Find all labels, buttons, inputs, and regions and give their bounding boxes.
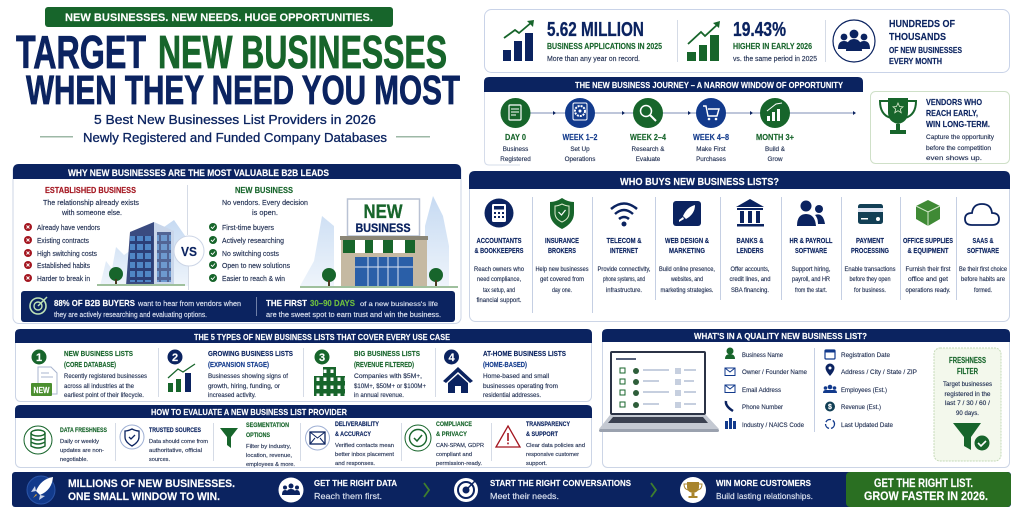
title — [16, 26, 460, 113]
criterion: segmentation options: employees & more. — [246, 462, 295, 468]
step: month 3+: Grow — [767, 156, 783, 163]
criterion: transparency and support — [496, 421, 585, 467]
buyer: telecom and internet: phone systems, and — [603, 277, 645, 283]
buyer: office supplies and equipment: operations ready. — [906, 288, 951, 294]
column: new business: Easier to reach & win — [222, 276, 285, 283]
buyer: hr and payroll software: from the start. — [795, 288, 827, 294]
illustration: laptop with database — [599, 351, 719, 432]
criterion: deliverability and accuracy: and responses. — [335, 461, 375, 467]
column: established business: The relationship already exists — [43, 200, 139, 207]
stat: 19.43%: HIGHER IN EARLY 2026 — [733, 42, 812, 51]
icon: people circle — [833, 20, 875, 62]
buyer: accountants and bookkeepers — [474, 198, 525, 304]
icon: target — [30, 297, 47, 314]
arrow: chevron one — [424, 483, 429, 497]
list type 4: home-based: businesses operating from — [483, 383, 558, 390]
callout: freshness filter: FRESHNESS — [949, 356, 986, 365]
footer step: win more customers: Build lasting relationships. — [716, 491, 813, 501]
criterion: transparency and support: support. — [526, 461, 547, 467]
evaluate heading — [15, 405, 592, 418]
illustration: office building — [97, 220, 188, 286]
buyer: web design and marketing: websites, and — [670, 277, 703, 283]
footer step: get the right data — [278, 478, 397, 502]
buyer: web design and marketing: WEB DESIGN & — [665, 236, 709, 245]
list type 2: expansion stage: 2 — [172, 352, 178, 364]
buyer: saas and software: Be their first choice — [959, 267, 1008, 273]
callout bar: buyer statistics: THE FIRST — [266, 298, 308, 308]
stat: hundreds of thousands: EVERY MONTH — [889, 57, 942, 66]
callout: freshness filter: FILTER — [957, 367, 978, 376]
list type 4: home-based: AT-HOME BUSINESS LISTS — [483, 349, 566, 358]
criterion: deliverability and accuracy: & ACCURACY — [335, 431, 371, 438]
panel: key statistics — [484, 10, 1010, 72]
criterion: compliance and privacy — [405, 421, 484, 467]
icon: funnel with check — [953, 423, 990, 451]
callout bar: buyer statistics: of a new business's life — [360, 302, 439, 308]
buyer: accountants and bookkeepers: tax setup, and — [483, 288, 515, 294]
illustration: new business storefront — [300, 196, 458, 288]
column: established business: Harder to break in — [37, 276, 90, 283]
footer step: win more customers — [680, 477, 813, 503]
criterion: trusted sources — [120, 425, 208, 463]
stat: hundreds of thousands: HUNDREDS OF — [889, 19, 955, 30]
buyer: insurance brokers — [536, 198, 588, 294]
icon: rocket — [27, 476, 55, 504]
buyer: hr and payroll software — [790, 200, 833, 294]
column: new business: No vendors. Every decision — [222, 200, 308, 207]
list type 1: core database — [31, 349, 147, 399]
icon: green growth chart — [687, 21, 720, 61]
buyer: hr and payroll software: Support hiring, — [792, 267, 831, 273]
list type 3: revenue filtered: in annual revenue. — [354, 392, 404, 399]
buyer: insurance brokers: day one. — [552, 288, 572, 294]
footer headline — [68, 478, 235, 503]
criterion: trusted sources: authoritative, official — [149, 448, 202, 454]
criterion: trusted sources: sources. — [149, 457, 170, 463]
callout: freshness filter: registered in the — [944, 391, 991, 398]
callout bar: buyer statistics: 30–90 DAYS — [310, 298, 355, 308]
step: week 1-2 — [562, 98, 598, 163]
list type 1: core database: earliest point of their lifecycle. — [64, 392, 144, 399]
stat: hundreds of thousands: OF NEW BUSINESSES — [889, 46, 963, 55]
criterion: data freshness: updates are non- — [60, 448, 104, 454]
column: established business — [24, 186, 139, 283]
quality list heading: WHAT'S IN A QUALITY NEW BUSINESS LIST? — [694, 331, 867, 341]
buyer: insurance brokers: BROKERS — [548, 246, 576, 255]
panel: how to evaluate a provider — [15, 405, 592, 468]
field list: column one: Email Address — [742, 387, 782, 394]
list type 1: core database: NEW BUSINESS LISTS — [64, 349, 133, 358]
step: week 1-2: WEEK 1–2 — [562, 133, 598, 142]
buyer: office supplies and equipment: Furnish their first — [906, 267, 951, 273]
field list: column two: Registration Date — [841, 352, 890, 359]
call to action: GROW FASTER IN 2026. — [864, 491, 988, 503]
icon: navy growth chart — [503, 20, 534, 61]
field list: column two: Employees (Est.) — [841, 387, 887, 394]
buyer: insurance brokers: Help new businesses — [536, 267, 588, 273]
stat: 5.62 million: 5.62 MILLION — [547, 19, 644, 41]
stat: 5.62 million — [547, 19, 662, 63]
field list: column two: $ — [828, 404, 832, 411]
criterion: transparency and support: TRANSPARENCY — [526, 421, 570, 428]
buyer: banks and lenders: SBA financing. — [731, 288, 769, 294]
buyer: banks and lenders: credit lines, and — [730, 277, 770, 283]
journey heading — [484, 77, 863, 92]
criterion: deliverability and accuracy: Verified contacts mean — [335, 443, 394, 449]
buyer: web design and marketing: marketing strategies. — [660, 288, 714, 294]
callout bar: buyer statistics: they are actively researching and evaluating options. — [54, 312, 207, 319]
column: new business: No switching costs — [222, 251, 279, 258]
callout text: Capture the opportunity — [926, 134, 995, 141]
callout: freshness filter: last 7 / 30 / 60 / — [945, 400, 990, 407]
types heading — [15, 329, 592, 343]
list type 1: core database: 1 — [36, 352, 42, 364]
footer step: get the right data: GET THE RIGHT DATA — [314, 478, 397, 488]
buyer: saas and software: SAAS & — [972, 236, 994, 245]
callout text: before the competition — [926, 145, 992, 152]
callout: freshness filter: Target businesses — [943, 381, 992, 388]
list type 2: expansion stage: growth, hiring, funding, or — [208, 383, 280, 390]
callout bar: buyer statistics — [21, 291, 455, 322]
panel: what's in a quality list — [599, 329, 1010, 468]
buyer: insurance brokers: get covered from — [540, 277, 584, 283]
callout bar: buyer statistics: 88% OF B2B BUYERS — [54, 298, 135, 308]
column: new business — [209, 186, 308, 283]
criterion: data freshness: negotiable. — [60, 457, 88, 463]
buyer: accountants and bookkeepers: financial support. — [476, 298, 522, 304]
criterion: compliance and privacy: & PRIVACY — [436, 431, 467, 438]
subtitle — [40, 112, 430, 145]
callout: vendors who reach early — [870, 92, 1010, 164]
footer bar — [12, 472, 1011, 507]
criterion: data freshness: Daily or weekly — [60, 439, 99, 445]
step: week 4-8 — [693, 98, 729, 163]
list type 3: revenue filtered: Companies with $5M+, — [354, 373, 422, 380]
step: week 1-2: Operations — [565, 156, 595, 163]
list type 3: revenue filtered: (REVENUE FILTERED) — [354, 362, 414, 369]
buyer: web design and marketing: Build online presence, — [659, 267, 715, 273]
divider: vs badge — [174, 185, 204, 290]
buyer: saas and software: formed. — [974, 288, 992, 294]
buyer: office supplies and equipment: & EQUIPMENT — [908, 246, 949, 255]
list type 1: core database: NEW — [34, 386, 50, 395]
stat: hundreds of thousands: THOUSANDS — [889, 32, 946, 43]
criterion: transparency and support: responsive customer — [526, 452, 579, 458]
buyer: banks and lenders: LENDERS — [736, 246, 764, 255]
who buys heading: WHO BUYS NEW BUSINESS LISTS? — [620, 177, 779, 188]
footer headline: ONE SMALL WINDOW TO WIN. — [68, 491, 220, 503]
stat: 5.62 million: More than any year on record. — [547, 56, 640, 63]
step: week 4-8: Purchases — [696, 156, 726, 163]
panel: why new businesses — [13, 164, 461, 324]
field list: column one: Owner / Founder Name — [742, 369, 807, 376]
column: new business: Open to new solutions — [222, 263, 290, 270]
title: WHEN THEY NEED YOU MOST — [26, 67, 460, 113]
buyer: banks and lenders: BANKS & — [736, 236, 764, 245]
criterion: deliverability and accuracy: better inbox placement — [335, 452, 394, 458]
callout text: REACH EARLY, — [926, 108, 978, 118]
banner: tagline: NEW BUSINESSES. NEW NEEDS. HUGE OPPORTUNITIES. — [65, 12, 373, 24]
callout bar: buyer statistics: are the sweet spot to earn trust and win the business. — [266, 312, 441, 319]
step: week 4-8: WEEK 4–8 — [693, 133, 729, 142]
buyer: banks and lenders — [730, 199, 770, 294]
column: established business: with someone else. — [61, 210, 122, 217]
buyer: saas and software: SOFTWARE — [967, 246, 999, 255]
buyer: accountants and bookkeepers: need compliance, — [477, 277, 521, 283]
callout: freshness filter: 90 days. — [956, 410, 979, 417]
footer step: start the right conversations: START THE RIGHT CONVERSATIONS — [490, 478, 631, 488]
criterion: data freshness: DATA FRESHNESS — [60, 427, 107, 434]
list type 4: home-based: Home-based and small — [483, 373, 549, 380]
criterion: compliance and privacy: compliant and — [436, 452, 472, 458]
divider: vs badge: VS — [181, 244, 197, 259]
buyer: telecom and internet — [598, 204, 651, 294]
field list: column two: Revenue (Est.) — [841, 404, 881, 411]
field list: column two: Address / City / State / ZIP — [841, 369, 917, 376]
buyer: insurance brokers: INSURANCE — [545, 236, 579, 245]
criterion: transparency and support: & SUPPORT — [526, 431, 559, 438]
panel: types of new business lists — [15, 329, 592, 402]
list type 2: expansion stage: (EXPANSION STAGE) — [208, 362, 269, 369]
list type 2: expansion stage: increased activity. — [208, 392, 256, 399]
footer step: start the right conversations: Meet their needs. — [490, 491, 559, 501]
column: established business: Already have vendors — [37, 225, 100, 232]
list type 4: home-based: residential addresses. — [483, 392, 541, 399]
footer step: get the right data: Reach them first. — [314, 491, 382, 501]
why heading — [13, 164, 461, 179]
column: new business: Actively researching — [222, 238, 284, 245]
types heading: THE 5 TYPES OF NEW BUSINESS LISTS THAT COVER EVERY USE CASE — [194, 332, 450, 342]
icon: trophy — [880, 98, 916, 134]
buyer: payment processing: PAYMENT — [856, 236, 884, 245]
list type 4: home-based: 4 — [448, 352, 455, 364]
step: day 0: Registered — [500, 156, 531, 163]
column: established business: High switching costs — [37, 251, 97, 258]
callout text — [926, 97, 995, 162]
buyer: telecom and internet: Provide connectivity, — [598, 267, 651, 273]
buyer: office supplies and equipment: OFFICE SUPPLIES — [903, 236, 953, 245]
panel: who buys new business lists — [469, 171, 1010, 322]
criterion: deliverability and accuracy — [306, 421, 394, 467]
list type 3: revenue filtered: 3 — [319, 352, 325, 364]
list type 4: home-based: (HOME-BASED) — [483, 362, 527, 369]
banner: tagline — [45, 7, 393, 27]
buyer: accountants and bookkeepers: & BOOKKEEPERS — [474, 246, 524, 255]
arrow: chevron two — [651, 483, 656, 497]
callout bar: buyer statistics: want to hear from vendors when — [137, 301, 241, 308]
evaluate heading: HOW TO EVALUATE A NEW BUSINESS LIST PROVIDER — [151, 407, 347, 417]
quality list heading — [602, 329, 1010, 342]
footer step: start the right conversations — [454, 478, 631, 502]
buyer: office supplies and equipment — [903, 200, 953, 294]
criterion: segmentation options: OPTIONS — [246, 432, 270, 439]
step: month 3+ — [756, 98, 794, 163]
buyer: payment processing: Enable transactions — [844, 267, 896, 273]
call to action — [846, 472, 1011, 507]
step: week 2-4 — [630, 98, 666, 163]
column: new business: NEW BUSINESS — [235, 186, 294, 195]
step: week 2-4: Evaluate — [636, 156, 661, 163]
criterion: trusted sources: TRUSTED SOURCES — [149, 427, 201, 434]
list type 1: core database: (CORE DATABASE) — [64, 362, 116, 369]
field list: column two — [823, 350, 917, 429]
column: established business: ESTABLISHED BUSINESS — [45, 186, 137, 195]
step: week 1-2: Set Up — [570, 146, 590, 153]
footer headline: MILLIONS OF NEW BUSINESSES. — [68, 478, 235, 490]
criterion: trusted sources: Data should come from — [149, 439, 208, 445]
call to action: GET THE RIGHT LIST. — [874, 478, 973, 490]
column: new business: First-time buyers — [222, 225, 274, 232]
list type 1: core database: Recently registered businesses — [64, 373, 147, 380]
callout text: WIN LONG-TERM. — [926, 119, 990, 129]
buyer: payment processing — [844, 204, 896, 294]
criterion: segmentation options — [220, 422, 295, 468]
who buys heading — [469, 171, 1010, 189]
buyer: hr and payroll software: SOFTWARE — [795, 246, 827, 255]
step: month 3+: MONTH 3+ — [756, 133, 794, 142]
buyer: telecom and internet: INTERNET — [610, 246, 638, 255]
stat: 19.43%: 19.43% — [733, 19, 786, 41]
step: day 0: Business — [503, 146, 528, 153]
field list: column one: Phone Number — [742, 404, 784, 411]
buyer: hr and payroll software: HR & PAYROLL — [790, 236, 833, 245]
subtitle: 5 Best New Businesses List Providers in 2026 — [94, 112, 376, 127]
list type 3: revenue filtered — [314, 349, 426, 399]
buyer: hr and payroll software: payroll, and HR — [792, 277, 831, 283]
buyer: telecom and internet: TELECOM & — [606, 236, 642, 245]
stat: 19.43%: vs. the same period in 2025 — [733, 56, 817, 63]
criterion: compliance and privacy: COMPLIANCE — [436, 421, 472, 428]
step: day 0: DAY 0 — [505, 133, 527, 142]
buyer: telecom and internet: infrastructure. — [606, 288, 642, 294]
list type 4: home-based — [443, 349, 566, 399]
journey heading: THE NEW BUSINESS JOURNEY – A NARROW WINDOW OF OPPORTUNITY — [575, 80, 843, 90]
stat: 19.43% — [733, 19, 817, 63]
buyer: banks and lenders: Offer accounts, — [730, 267, 770, 273]
buyer: web design and marketing: MARKETING — [669, 246, 705, 255]
step: week 4-8: Make First — [696, 146, 726, 153]
criterion: deliverability and accuracy: DELIVERABILITY — [335, 421, 379, 428]
buyer: payment processing: for business. — [854, 288, 886, 294]
illustration: new business storefront: BUSINESS — [356, 221, 410, 235]
criterion: compliance and privacy: CAN-SPAM, GDPR — [436, 443, 484, 449]
why heading: WHY NEW BUSINESSES ARE THE MOST VALUABLE B2B LEADS — [68, 168, 329, 179]
buyer: payment processing: before they open — [850, 277, 890, 283]
list type 3: revenue filtered: BIG BUSINESS LISTS — [354, 349, 420, 358]
field list: column one: Industry / NAICS Code — [742, 422, 804, 429]
field list: column two: Last Updated Date — [841, 422, 893, 429]
buyer: web design and marketing — [659, 201, 715, 294]
callout text: VENDORS WHO — [926, 97, 982, 107]
column: new business: is open. — [252, 210, 278, 217]
list type 3: revenue filtered: $10M+, $50M+ or $100M+ — [354, 383, 426, 390]
criterion: compliance and privacy: permission-ready. — [436, 461, 482, 467]
list type 1: core database: across all industries at the — [64, 383, 135, 390]
criterion: segmentation options: Filter by industry, — [246, 444, 291, 450]
criterion: transparency and support: Clear data policies and — [526, 443, 585, 449]
buyer: saas and software — [959, 204, 1008, 294]
subtitle: Newly Registered and Funded Company Databases — [83, 130, 388, 145]
panel: new business journey — [484, 77, 863, 165]
title: TARGET — [16, 26, 146, 78]
journey timeline arrow — [515, 111, 856, 115]
field list: column one — [725, 348, 807, 429]
buyer: accountants and bookkeepers: Reach owners who — [474, 267, 525, 273]
callout: freshness filter — [934, 348, 1001, 461]
step: month 3+: Build & — [765, 146, 786, 153]
step: week 2-4: Research & — [632, 146, 665, 153]
buyer: accountants and bookkeepers: ACCOUNTANTS — [476, 236, 522, 245]
step: day 0 — [500, 98, 531, 163]
stat: 5.62 million: BUSINESS APPLICATIONS IN 2025 — [547, 42, 662, 51]
buyer: saas and software: before habits are — [961, 277, 1006, 283]
column: established business: Established habits — [37, 263, 90, 270]
illustration: new business storefront: NEW — [364, 202, 403, 223]
title: NEW BUSINESSES — [158, 26, 447, 78]
criterion: data freshness — [24, 426, 107, 463]
stat: hundreds of thousands — [889, 19, 963, 66]
buyer: payment processing: PROCESSING — [851, 246, 889, 255]
footer step: win more customers: WIN MORE CUSTOMERS — [716, 478, 811, 488]
criterion: segmentation options: SEGMENTATION — [246, 422, 289, 429]
field list: column one: Business Name — [742, 352, 783, 359]
step: week 2-4: WEEK 2–4 — [630, 133, 666, 142]
callout text: even shows up. — [926, 155, 982, 162]
criterion: segmentation options: location, revenue, — [246, 453, 292, 459]
column: established business: Existing contracts — [37, 238, 89, 245]
list type 2: expansion stage — [168, 349, 293, 399]
list type 2: expansion stage: GROWING BUSINESS LISTS — [208, 349, 293, 358]
buyer: office supplies and equipment: office and get — [908, 277, 948, 283]
list type 2: expansion stage: Businesses showing signs of — [208, 373, 288, 380]
